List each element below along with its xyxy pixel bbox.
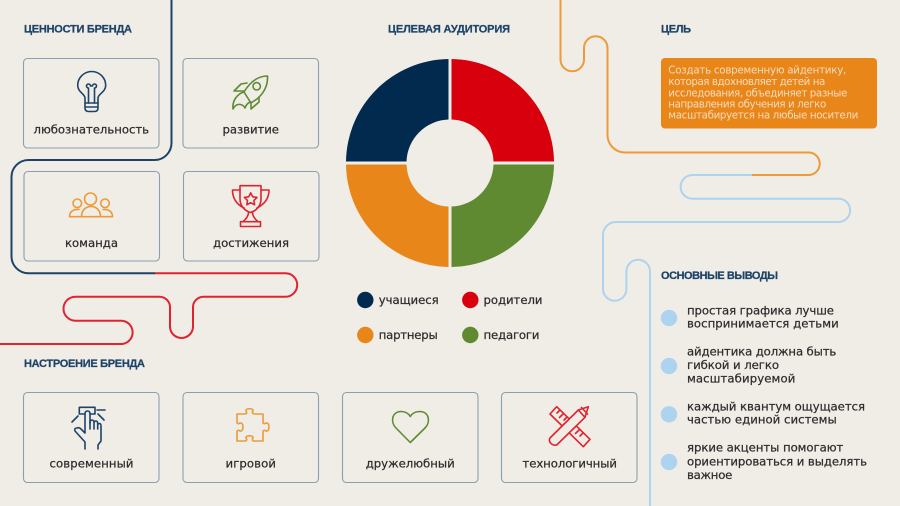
- takeaway 1: [661, 303, 839, 331]
- card: technological: [502, 392, 637, 482]
- legend item: students: учащиеся: [379, 293, 439, 307]
- callout: goal: которая вдохновляет детей на: [668, 76, 825, 88]
- connector line: light blue: [603, 175, 850, 506]
- icon: rocket: [233, 76, 268, 109]
- legend item: partners: партнеры: [379, 328, 438, 342]
- callout: goal: [661, 58, 877, 128]
- icon: ruler and pencil: [549, 407, 590, 447]
- legend item: students: [357, 292, 439, 308]
- takeaway 3: частью единой системы: [687, 413, 837, 427]
- takeaway 2: масштабируемой: [687, 372, 795, 386]
- takeaway 4: ориентироваться и выделять: [687, 454, 867, 468]
- takeaway 3: каждый квантум ощущается: [687, 399, 865, 413]
- card: modern: современный: [50, 456, 134, 470]
- takeaway 3: [661, 399, 865, 427]
- takeaway 4: яркие акценты помогают: [687, 441, 843, 455]
- connector line: orange: [560, 0, 820, 175]
- card: friendly: [342, 392, 478, 482]
- legend item: parents: родители: [484, 293, 542, 307]
- takeaway 2: гибкой и легко: [687, 358, 779, 372]
- takeaway 1: воспринимается детьми: [687, 317, 839, 331]
- card: achievements: [184, 172, 319, 261]
- legend: [357, 292, 542, 343]
- takeaway 4: [661, 441, 867, 482]
- takeaway 2: [661, 344, 836, 386]
- icon: trophy: [232, 186, 269, 226]
- connector line: red: [0, 273, 297, 344]
- card: team: [24, 172, 160, 261]
- card: team: команда: [65, 236, 118, 250]
- callout: goal: направления обучения и легко: [668, 98, 826, 110]
- icon: light bulb: [78, 72, 106, 112]
- heading: key takeaways: ОСНОВНЫЕ ВЫВОДЫ: [661, 270, 778, 282]
- card: curiosity: [24, 58, 159, 148]
- callout: goal: исследования, объединяет разные: [668, 87, 847, 99]
- legend item: partners: [357, 327, 438, 343]
- heading: target audience: ЦЕЛЕВАЯ АУДИТОРИЯ: [388, 24, 510, 36]
- legend item: parents: [462, 292, 542, 308]
- callout: goal: Создать современную айдентику,: [668, 64, 846, 76]
- card: development: развитие: [222, 122, 279, 136]
- card: playful: игровой: [226, 456, 276, 470]
- icon: hand pressing button: [72, 407, 105, 449]
- card: playful: [183, 392, 318, 482]
- heading: brand mood: НАСТРОЕНИЕ БРЕНДА: [24, 358, 145, 370]
- card: technological: технологичный: [522, 456, 617, 470]
- takeaway 1: простая графика лучше: [687, 303, 834, 317]
- card: friendly: дружелюбный: [366, 456, 455, 470]
- takeaway 4: важное: [687, 468, 732, 482]
- icon: team: [70, 193, 112, 217]
- card: modern: [24, 392, 159, 482]
- card: development: [183, 58, 318, 148]
- icon: puzzle piece: [237, 409, 269, 441]
- heading: goal: ЦЕЛЬ: [661, 24, 691, 36]
- card: achievements: достижения: [213, 236, 289, 250]
- callout: goal: масштабируется на любые носители: [668, 110, 858, 122]
- icon: heart: [393, 412, 428, 442]
- legend item: teachers: педагоги: [484, 328, 540, 342]
- donut chart: audience: [346, 59, 554, 267]
- card: curiosity: любознательность: [34, 122, 149, 136]
- heading: brand values: ЦЕННОСТИ БРЕНДА: [24, 24, 132, 36]
- connector line: navy: [11, 0, 172, 273]
- legend item: teachers: [462, 327, 540, 343]
- takeaway 2: айдентика должна быть: [687, 344, 836, 358]
